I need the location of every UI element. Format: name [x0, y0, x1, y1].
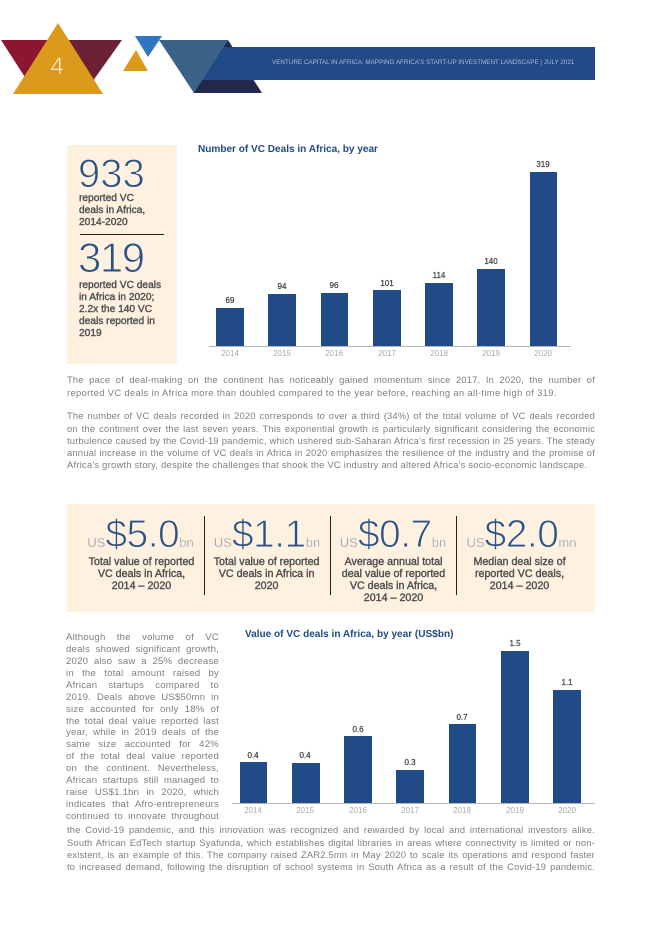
chart heading: value of deals: Value of VC deals in Africa, by year (US$bn) — [245, 629, 453, 640]
bar chart: number of deals: 2014 — [221, 349, 239, 358]
bar chart: number of deals: 114 — [433, 271, 445, 280]
stat caption: Average annual total — [345, 556, 442, 568]
text block: value decrease column: continued to innovate throughout — [66, 811, 219, 822]
text block: value decrease column — [66, 632, 219, 822]
text block: deal-making pace — [67, 375, 595, 398]
bar chart: number of deals: 2018 — [430, 349, 448, 358]
text block: 2020 deals share — [67, 411, 595, 470]
text block: 2020 deals share: The number of VC deals recorded in 2020 corresponds to over a third (34%) of the total volume of VC deals recorded — [67, 411, 595, 421]
stat: 319: 319 — [78, 234, 144, 281]
stat caption: VC deals in Africa, — [350, 580, 437, 592]
text block: Syafunda example — [67, 825, 595, 872]
text block: value decrease column: African startups compared to — [66, 680, 219, 691]
running title: VENTURE CAPITAL IN AFRICA: MAPPING AFRICA'S START-UP INVESTMENT LANDSCAPE | JULY 2021 — [272, 59, 574, 66]
bar chart: value of deals: 2015 — [296, 806, 314, 815]
chart heading: number of deals: Number of VC Deals in Africa, by year — [198, 144, 378, 155]
bar chart: value of deals: 2014 — [244, 806, 262, 815]
text block: value decrease column: 2019. Deals above US$50mn in — [66, 692, 219, 703]
stat caption: 319: 2.2x the 140 VC — [79, 304, 152, 315]
text block: value decrease column: on the continent. Nevertheless, — [66, 763, 219, 774]
bar chart: number of deals: 101 — [380, 279, 394, 288]
stat caption: 319: deals reported in — [79, 316, 155, 327]
text block: value decrease column: 2020 also saw a 25% decrease — [66, 656, 219, 667]
bar chart: number of deals: 2017 — [378, 349, 396, 358]
stat caption: 2020 — [255, 580, 278, 592]
stat caption: deal value of reported — [342, 568, 445, 580]
stat caption: Total value of reported — [214, 556, 319, 568]
text block: Syafunda example: the Covid-19 pandemic, and this innovation was recognized and rewarded by local and international investors alike. — [67, 825, 595, 835]
panel: deal count stats — [67, 145, 177, 364]
bar chart: number of deals: 2015 — [273, 349, 291, 358]
stat caption: 319: 2019 — [79, 328, 102, 339]
stat caption — [214, 556, 319, 592]
stat caption: 319: reported VC deals — [79, 280, 161, 291]
text block: 2020 deals share: turbulence caused by the Covid-19 pandemic, which ushered sub-Saharan Africa's first recession in 25 years. The steady — [67, 436, 595, 446]
text block: value decrease column: deals showed significant growth, — [66, 644, 219, 655]
bar chart: value of deals: 2020 — [558, 806, 576, 815]
stat caption: 2014 – 2020 — [112, 580, 171, 592]
panel: deal value stats — [67, 504, 595, 612]
bar chart: value of deals — [232, 639, 595, 815]
text block: 2020 deals share: on the continent over the last seven years. This exponential growth is particularly significant considering the economic — [67, 424, 595, 434]
text block: 2020 deals share: Africa's growth story, despite the challenges that shook the VC industry and altered Africa's socio-economic landscape. — [67, 460, 587, 470]
header banner — [1, 23, 595, 94]
bar chart: value of deals: 1.5 — [509, 639, 521, 648]
stat caption: Median deal size of — [473, 556, 566, 568]
bar chart: value of deals: 2018 — [453, 806, 471, 815]
stat caption: VC deals in Africa, — [98, 568, 185, 580]
bar chart: number of deals: 96 — [330, 281, 338, 290]
bar chart: number of deals: 2020 — [534, 349, 552, 358]
text block: value decrease column: same size accounted for 42% — [66, 739, 219, 750]
bar chart: number of deals: 2019 — [482, 349, 500, 358]
header graphic: triangles — [1, 23, 595, 94]
text block: value decrease column: indicates that Afro-entrepreneurs — [66, 799, 219, 810]
stat caption: 933: reported VC — [79, 193, 134, 204]
bar chart: value of deals: 2019 — [506, 806, 524, 815]
stat: US$1.1bn: US$1.1bn — [214, 513, 320, 556]
stat: US$5.0bn: US$5.0bn — [87, 513, 194, 556]
bar chart: value of deals: 2017 — [401, 806, 419, 815]
stat caption: 933: deals in Africa, — [79, 205, 145, 216]
stat caption: reported VC deals, — [475, 568, 564, 580]
text block: value decrease column: year, while in 2019 deals of the — [66, 727, 219, 738]
stat: 933: 933 — [78, 152, 145, 196]
text block: value decrease column: in the total amount raised by — [66, 668, 219, 679]
text block: value decrease column: raise US$1.1bn in 2020, which — [66, 787, 219, 798]
stat caption: 933: 2014-2020 — [79, 217, 128, 228]
page number: 4 — [50, 53, 64, 80]
text block: deal-making pace: The pace of deal-making on the continent has noticeably gained momentum since 2017. In 2020, the number of — [67, 375, 595, 385]
stat caption: 933 — [79, 193, 145, 228]
bar chart: value of deals: 0.7 — [456, 713, 468, 722]
bar chart: number of deals: 94 — [278, 282, 286, 291]
bar chart: number of deals: 69 — [226, 296, 234, 305]
stat caption — [88, 556, 194, 592]
stat caption — [473, 556, 566, 592]
bar chart: number of deals: 2016 — [325, 349, 343, 358]
text block: value decrease column: African startups still managed to — [66, 775, 219, 786]
bar chart: value of deals: 0.4 — [247, 751, 259, 760]
text block: value decrease column: Although the volume of VC — [66, 632, 219, 643]
bar chart: number of deals: 319 — [536, 160, 550, 169]
text block: Syafunda example: existent, is an example of this. The company raised ZAR2.5mn in May 2020 to scale its operations and respond faster — [67, 850, 595, 860]
stat caption: 319 — [79, 280, 161, 339]
stat caption: Total value of reported — [89, 556, 194, 568]
text block: value decrease column: of the total deal value reported — [66, 751, 219, 762]
text block: Syafunda example: to increased demand, following the disruption of school systems in South Africa as a result of the Covid-19 pandemic. — [67, 862, 595, 872]
bar chart: value of deals: 1.1 — [561, 678, 573, 687]
stat caption — [342, 556, 445, 604]
bar chart: value of deals: 2016 — [349, 806, 367, 815]
stat: US$2.0mn: US$2.0mn — [466, 513, 577, 556]
stat: US$0.7bn: US$0.7bn — [340, 513, 446, 556]
text block: value decrease column: size accounted for only 18% of — [66, 704, 219, 715]
text block: deal-making pace: reported VC deals in Africa more than doubled compared to the year before, reaching an all-time high of 319. — [67, 388, 557, 398]
bar chart: number of deals: 140 — [484, 257, 498, 266]
bar chart: value of deals: 0.4 — [299, 751, 311, 760]
bar chart: value of deals: 0.6 — [352, 725, 364, 734]
text block: value decrease column: the total deal value reported last — [66, 716, 219, 727]
stat caption: 2014 – 2020 — [490, 580, 549, 592]
stat caption: 319: in Africa in 2020; — [79, 292, 154, 303]
text block: 2020 deals share: annual increase in the volume of VC deals in Africa in 2020 emphasizes the resilience of the industry and the promise of — [67, 448, 595, 458]
stat caption: 2014 – 2020 — [364, 592, 423, 604]
bar chart: value of deals: 0.3 — [404, 758, 416, 767]
text block: Syafunda example: South African EdTech startup Syafunda, which establishes digital libraries in areas where connectivity is limited or non- — [67, 838, 595, 848]
stat caption: VC deals in Africa in — [219, 568, 314, 580]
bar chart: number of deals — [209, 160, 571, 358]
